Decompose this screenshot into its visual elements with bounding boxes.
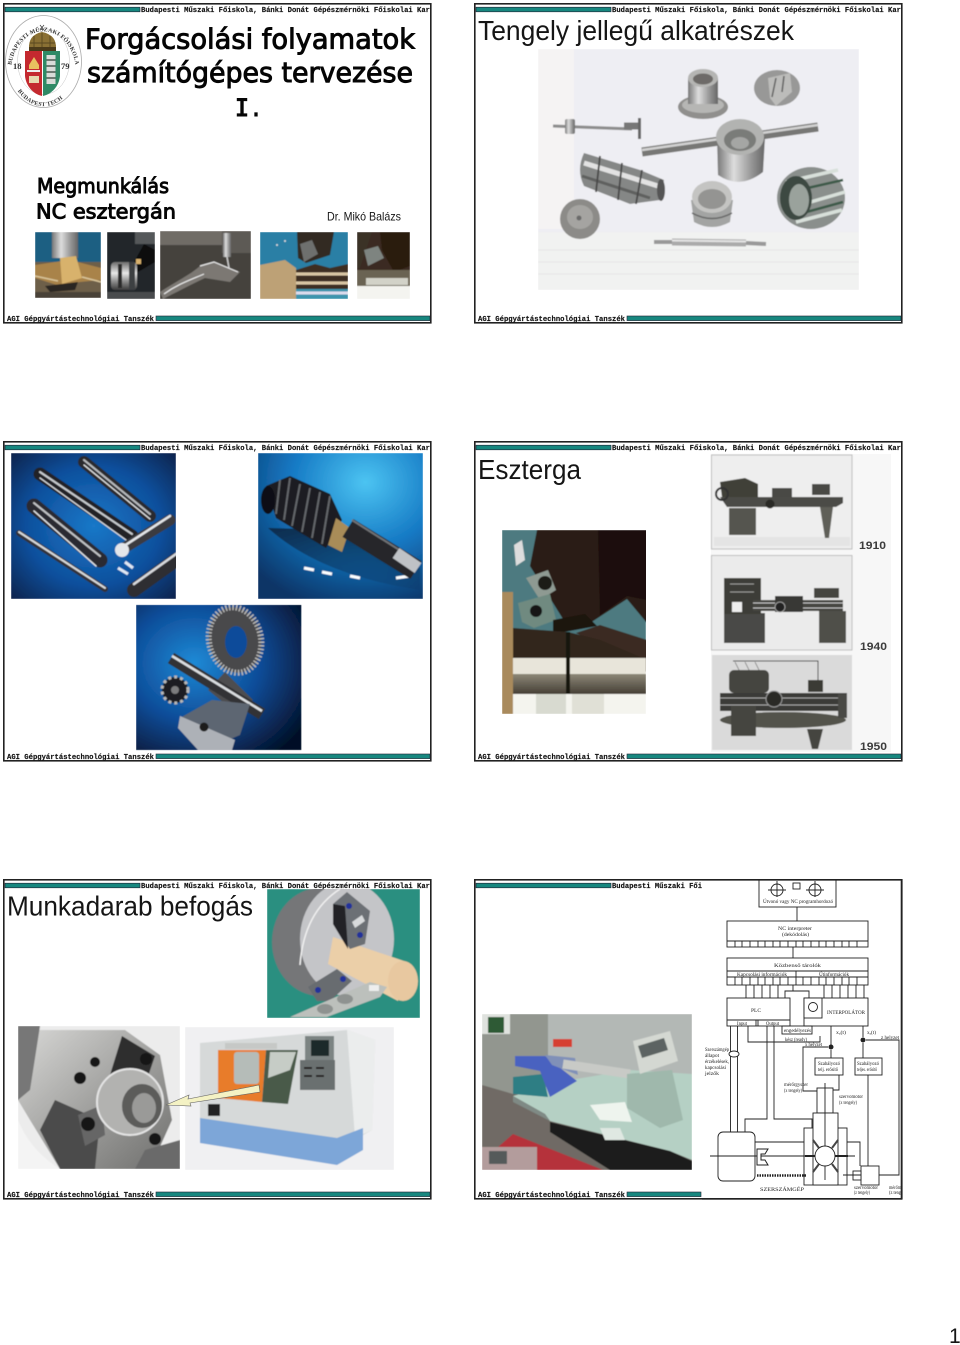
footer bar: AGI Gépgyártástechnológiai Tanszék (478, 316, 625, 324)
panel: title slide (3, 3, 432, 324)
photo: chuck close-up (18, 1026, 180, 1169)
subtitle (36, 174, 176, 224)
box: interpolator: INTERPOLÁTOR (827, 1008, 865, 1016)
illustration: 3D lathe scene (482, 1014, 692, 1170)
part: small disc (754, 70, 800, 106)
photo: CNC lathe (185, 1027, 394, 1170)
photo: dark chip removal (357, 232, 410, 299)
photo: lathe history (711, 454, 891, 753)
photo: milling gold workpiece (35, 232, 101, 298)
photo: several splined shafts (11, 453, 176, 599)
part: stepped cylinder (580, 153, 665, 204)
box: PLC: PLC (751, 1008, 761, 1014)
header bar: Budapesti Műszaki Főiskola, Bánki Donát Gépészmérnöki Főiskolai Kar (141, 7, 430, 15)
text block: machine labels: SZERSZÁMGÉP (760, 1185, 804, 1193)
box: position controllers (815, 1058, 882, 1075)
footer bar (7, 1192, 430, 1200)
box: position controllers: telj. erősítő (818, 1067, 838, 1073)
photo: large splined shaft (258, 453, 423, 599)
header bar: Budapesti Műszaki Főiskola, Bánki Donát Gépészmérnöki Főiskolai Kar (612, 445, 901, 453)
icon: university seal: 18 (13, 61, 22, 71)
text block: interlocks: xₐ(t) (836, 1029, 846, 1036)
footer bar (7, 754, 430, 762)
icon: university seal: 79 (61, 61, 70, 71)
part: long shaft with hub (642, 119, 818, 182)
header bar (476, 883, 702, 891)
box: interpolator (804, 998, 868, 1026)
lathe 1910 (712, 455, 852, 549)
lathe 1950 (712, 655, 852, 750)
text block: sensors: (x tengely) (839, 1099, 857, 1106)
year label: 1950 (860, 741, 887, 753)
text block: machine labels (760, 1185, 902, 1196)
text block: sensors: (x tengely) (784, 1087, 802, 1094)
subtitle: Megmunkálás (37, 174, 169, 198)
part: grooved ring (777, 167, 845, 229)
photo: turning tool (107, 232, 155, 299)
text block: sensors: mérőrgyszer (784, 1082, 808, 1088)
arrow: machine to chuck (166, 1085, 260, 1106)
text block: sensors (784, 1082, 863, 1106)
panel: shafts and gears (4, 442, 431, 762)
box: position controllers: teljes. erősítő (857, 1067, 877, 1073)
footer bar (478, 754, 901, 762)
part: pin (654, 240, 766, 244)
footer bar: AGI Gépgyártástechnológiai Tanszék (478, 1192, 625, 1200)
panel: CNC lathe and control diagram (475, 879, 902, 1200)
photo: bevel gear assembly (136, 604, 302, 750)
panel: lathe (475, 442, 902, 762)
icon: university seal: BUDAPEST TECH (18, 88, 63, 106)
box: intermediate storage (727, 958, 868, 985)
illustration: chuck with workpiece (267, 889, 420, 1018)
text block: interlocks: állapot (705, 1053, 719, 1059)
box: NC interpreter: NC interpreter (778, 926, 812, 932)
diagram: NC control block schematic (702, 880, 902, 1198)
text block: interlocks: Szerszámgép (705, 1047, 729, 1053)
text block: interlocks: kész (ready) (785, 1036, 807, 1043)
footer bar: AGI Gépgyártástechnológiai Tanszék (7, 316, 154, 324)
subtitle: NC esztergán (36, 200, 176, 224)
year label: 1940 (860, 641, 887, 653)
panel: shaft-type parts (475, 4, 902, 324)
header bar (476, 445, 901, 453)
box: PLC (727, 998, 790, 1027)
heading: Munkadarab befogás (7, 890, 253, 922)
box: position controllers: Szabályozó (818, 1061, 840, 1067)
box: intermediate storage: Közbenső tárolók (774, 963, 821, 969)
box: programme carrier (759, 880, 836, 907)
header bar: Budapesti Műszaki Főiskola, Bánki Donát Gépészmérnöki Főiskolai Kar (141, 883, 430, 891)
heading: Tengely jellegű alkatrészek (478, 15, 794, 46)
title: I. (235, 94, 263, 126)
footer bar (478, 316, 901, 324)
text block: interlocks: jelzők (704, 1071, 719, 1077)
text block: machine labels: mérőm (889, 1185, 902, 1191)
header bar: Budapesti Műszaki Főiskola, Bánki Donát Gépészmérnöki Főiskolai Kar (612, 7, 901, 15)
text block: sensors: szervomotor (839, 1094, 863, 1100)
footer bar: AGI Gépgyártástechnológiai Tanszék (478, 754, 625, 762)
photo: turning insert close-up (502, 530, 646, 714)
header bar (5, 445, 430, 453)
author: Dr. Mikó Balázs (327, 210, 401, 224)
text block: machine labels: (z teng (889, 1189, 901, 1196)
footer bar: AGI Gépgyártástechnológiai Tanszék (7, 1192, 154, 1200)
part: flange (678, 69, 728, 119)
title: Forgácsolási folyamatok (85, 22, 416, 56)
text block: interlocks: engedélyezés (784, 1028, 811, 1034)
box: programme carrier: Útvonó vagy NC programhordozó (763, 897, 833, 905)
icon: university seal (5, 15, 82, 108)
header bar (5, 883, 430, 891)
text block: interlocks: x helyzet (805, 1042, 822, 1048)
part: thin shaft (553, 118, 641, 139)
box: PLC: Output (766, 1021, 779, 1027)
box: PLC: Input (737, 1021, 747, 1027)
heading: Eszterga (478, 454, 582, 485)
text block: interlocks: z helyzet (881, 1035, 899, 1041)
year label: 1910 (859, 540, 886, 552)
box: intermediate storage: Kapcsolási információk (737, 971, 787, 978)
machine tool schematic (710, 1083, 892, 1185)
part: bottom-left disc (560, 199, 600, 239)
header bar (476, 7, 901, 15)
footer bar: AGI Gépgyártástechnológiai Tanszék (7, 754, 154, 762)
icon: university seal: BUDAPESTI MŰSZAKI FŐISKOLA (8, 26, 79, 65)
box: NC interpreter: (dekódolás) (782, 931, 809, 938)
text block: interlocks: érzékelések, (705, 1059, 730, 1065)
header bar (5, 7, 430, 15)
footer bar (478, 1192, 701, 1200)
box: intermediate storage: Útinformációk (819, 970, 849, 978)
text block: machine labels: (z tengely) (854, 1189, 870, 1196)
text block: machine labels: szervomotor (854, 1185, 878, 1191)
title (85, 22, 416, 126)
box: position controllers: Szabályozó (857, 1061, 879, 1067)
lathe 1940 (712, 556, 852, 650)
text block: interlocks: kapcsolási (705, 1065, 726, 1071)
header bar: Budapesti Műszaki Főiskola, Bánki Donát Gépészmérnöki Főiskolai Kar (141, 445, 430, 453)
header bar: Budapesti Műszaki Fői (612, 883, 702, 891)
part: ring (691, 181, 733, 227)
photo: milled part (160, 231, 251, 299)
box: NC interpreter (727, 921, 868, 947)
text block: interlocks: xₐ(t) (867, 1029, 876, 1036)
photo: blue background turning (260, 232, 348, 299)
title: számítógépes tervezése (87, 56, 413, 89)
photo: machined parts (538, 49, 859, 290)
panel: workpiece clamping (4, 880, 431, 1200)
footer bar (7, 316, 430, 324)
text block: interlocks (704, 1026, 899, 1077)
